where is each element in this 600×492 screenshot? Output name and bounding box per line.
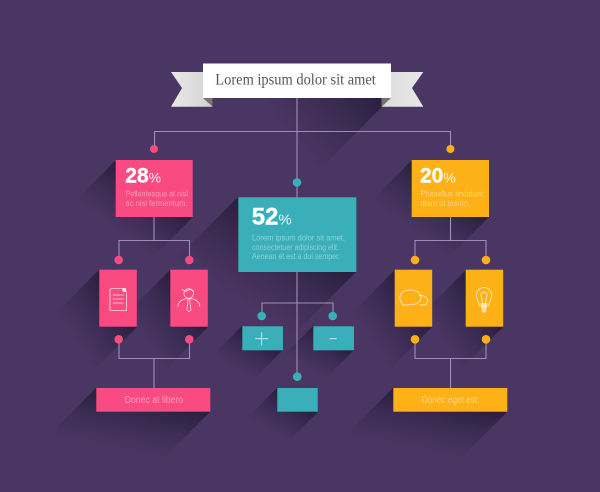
stat 28%: 28%	[125, 164, 161, 187]
dot	[293, 178, 301, 187]
ribbon right tail	[382, 72, 423, 107]
ribbon left tail	[171, 72, 212, 107]
ribbon right fold	[382, 98, 391, 107]
title ribbon	[171, 64, 423, 107]
panel: yellow branch	[393, 145, 507, 412]
pink stat box 28%	[116, 160, 193, 217]
description: Phasellus tincidunt	[420, 190, 484, 198]
ribbon main band	[203, 64, 391, 98]
icon: speech bubbles	[400, 290, 428, 305]
bar label: Donec eget est.	[422, 395, 480, 406]
stat 52%: 52%	[252, 203, 292, 230]
pink label bar	[96, 388, 210, 412]
ribbon left fold	[203, 98, 212, 107]
yellow label bar	[393, 388, 507, 412]
description line 2: diam ut ipsum.	[420, 199, 470, 208]
yellow chat card	[395, 270, 432, 327]
dot	[446, 145, 454, 153]
connector lines	[119, 98, 486, 388]
stat 20%: 20%	[420, 164, 456, 187]
teal empty bar	[277, 388, 318, 412]
pink person card	[170, 270, 208, 327]
icon: businessman	[178, 289, 200, 312]
pink document card	[99, 270, 137, 327]
icon: minus	[330, 338, 336, 340]
description line 2: consectetuer adipiscing elit.	[252, 243, 339, 252]
icon: light bulb	[476, 288, 492, 312]
teal minus card	[313, 326, 354, 350]
title: Lorem ipsum dolor sit amet	[215, 72, 376, 88]
description: Lorem ipsum dolor sit amet,	[252, 234, 345, 243]
teal stat box 52%	[238, 197, 356, 272]
connector dots	[411, 256, 490, 344]
connector dots	[114, 256, 194, 344]
icon: document	[110, 288, 126, 310]
connector dots	[257, 312, 337, 381]
yellow bulb card	[466, 270, 503, 327]
icon: plus	[256, 332, 268, 345]
description: Pellentesque at nisl	[126, 190, 188, 198]
dot	[150, 145, 158, 153]
teal plus card	[242, 326, 283, 350]
long shadows	[26, 64, 507, 482]
panel: pink branch	[96, 145, 210, 412]
description line 3: Aenean et est a dui semper.	[252, 252, 340, 261]
bar label: Donec at libero	[125, 395, 184, 406]
description line 2: ac nisi fermentum.	[126, 199, 188, 208]
yellow stat box 20%	[412, 160, 489, 217]
panel: teal branch	[238, 178, 356, 412]
